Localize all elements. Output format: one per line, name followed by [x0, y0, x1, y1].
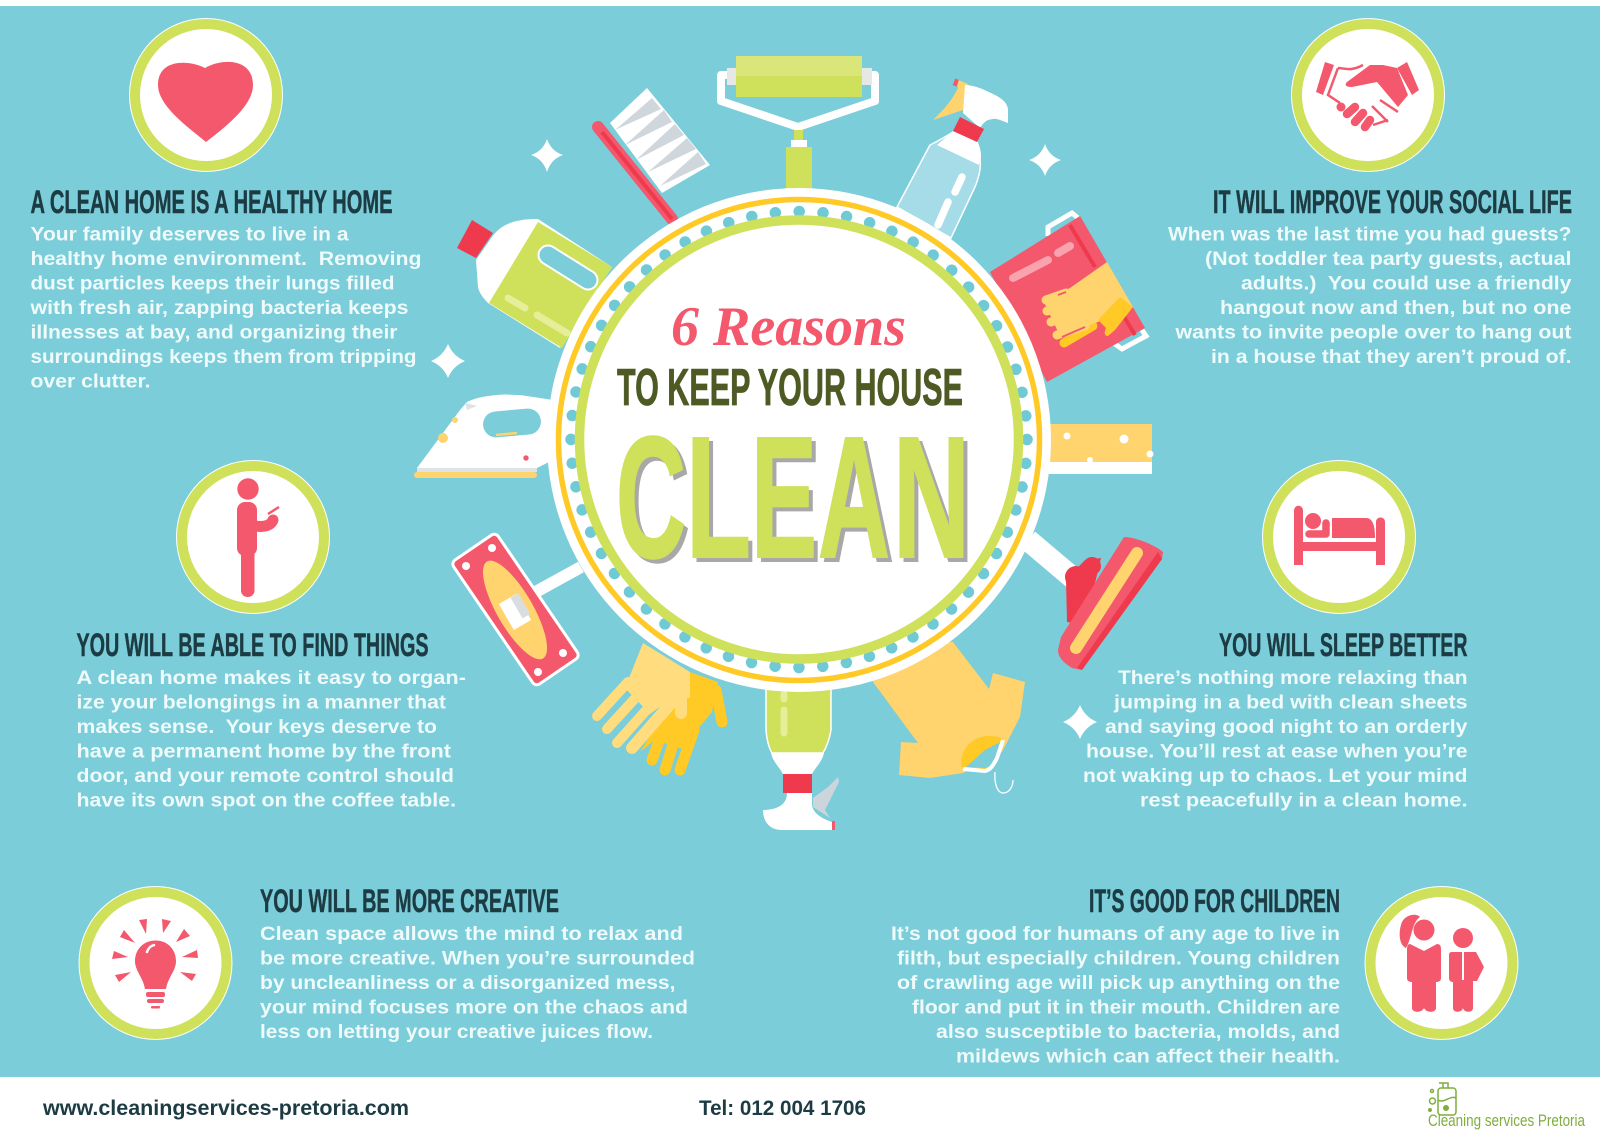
- icon: handshake: [1291, 18, 1445, 172]
- icon: mop: [451, 532, 581, 687]
- text block: have a permanent home by the front: [76, 742, 452, 762]
- panel: children: [891, 883, 1518, 1068]
- text block: door, and your remote control should: [76, 766, 454, 787]
- cleaning tools ring: [414, 56, 1163, 830]
- title: to keep your house: TO KEEP YOUR HOUSE: [617, 359, 963, 417]
- text block: with fresh air, zapping bacteria keeps: [29, 298, 409, 319]
- icon: yellow shirt: [873, 640, 1025, 793]
- heading: YOU WILL BE ABLE TO FIND THINGS: [76, 627, 428, 663]
- icon: spray bottle: [897, 78, 1008, 238]
- icon: person: [176, 460, 330, 614]
- title: clean: E: [755, 404, 821, 598]
- icon: squeegee: [1028, 537, 1163, 670]
- heading: A CLEAN HOME IS A HEALTHY HOME: [30, 184, 392, 220]
- website: www.cleaningservices-pretoria.com: [42, 1097, 409, 1120]
- text block: It’s not good for humans of any age to live in: [891, 924, 1340, 945]
- text block: have its own spot on the coffee table.: [76, 790, 456, 812]
- title: clean: N: [893, 400, 970, 594]
- title: clean: L: [690, 404, 755, 598]
- icon: bleach bottle: [457, 219, 612, 348]
- icon: bottom spray bottle: [763, 688, 839, 830]
- icon: children: [1364, 886, 1518, 1040]
- text block: [260, 924, 695, 1043]
- icon: iron: [414, 395, 553, 478]
- icon: soap bottle: [1429, 1083, 1456, 1115]
- icon: brush: [598, 88, 710, 219]
- title: clean: C: [616, 400, 686, 594]
- text block: over clutter.: [30, 372, 150, 392]
- text block: be more creative. When you’re surrounded: [260, 948, 695, 970]
- footer: [42, 1083, 1585, 1130]
- title: clean: A: [822, 404, 894, 598]
- text block: rest peacefully in a clean home.: [1140, 790, 1468, 812]
- deep yellow glove: [640, 672, 722, 770]
- text block: dust particles keeps their lungs filled: [30, 274, 394, 294]
- text block: your mind focuses more on the chaos and: [260, 998, 688, 1018]
- panel: social life: [1168, 18, 1572, 368]
- icon: paint roller: [721, 56, 875, 189]
- text block: by uncleanliness or a disorganized mess,: [260, 973, 676, 994]
- text block: mildews which can affect their health.: [956, 1046, 1340, 1068]
- panel: sleep better: [1083, 460, 1468, 812]
- text block: makes sense. Your keys deserve to: [76, 717, 437, 738]
- text block: ize your belongings in a manner that: [76, 692, 447, 714]
- text block: jumping in a bed with clean sheets: [1113, 692, 1468, 714]
- text block: When was the last time you had guests?: [1168, 224, 1572, 246]
- text block: There’s nothing more relaxing than: [1118, 668, 1468, 689]
- title: clean: [616, 400, 974, 598]
- icon: red box with yellow glove: [990, 213, 1146, 382]
- title: clean: A: [818, 400, 890, 594]
- text block: healthy home environment. Removing: [30, 249, 422, 270]
- panel: healthy home: [29, 18, 422, 392]
- text block: A clean home makes it easy to organ-: [76, 668, 466, 689]
- text block: floor and put it in their mouth. Children are: [912, 998, 1340, 1018]
- text block: hangout now and then, but no one: [1220, 298, 1572, 319]
- heading: YOU WILL BE MORE CREATIVE: [260, 883, 559, 919]
- text block: illnesses at bay, and organizing their: [30, 322, 398, 344]
- text block: of crawling age will pick up anything on the: [897, 973, 1340, 994]
- text block: not waking up to chaos. Let your mind: [1083, 766, 1468, 787]
- logo: [1428, 1083, 1585, 1130]
- text block: [29, 224, 422, 392]
- text block: [1083, 668, 1468, 812]
- text block: [1168, 224, 1572, 368]
- sparkle stars: [431, 139, 1097, 739]
- icon: rubber gloves: [597, 643, 722, 770]
- text block: less on letting your creative juices flow.: [260, 1022, 653, 1043]
- telephone: Tel: 012 004 1706: [699, 1097, 866, 1120]
- title: clean: E: [751, 400, 817, 594]
- light yellow glove: [597, 643, 690, 748]
- text block: house. You’ll rest at ease when you’re: [1086, 742, 1468, 762]
- icon: heart: [129, 18, 283, 172]
- text block: in a house that they aren’t proud of.: [1211, 347, 1572, 368]
- text block: filth, but especially children. Young children: [897, 948, 1340, 970]
- icon: sponge: [1040, 424, 1154, 474]
- panel: find things: [76, 460, 466, 812]
- text block: [891, 924, 1340, 1068]
- text block: Clean space allows the mind to relax and: [260, 924, 683, 945]
- icon: bed: [1262, 460, 1416, 614]
- text block: [76, 668, 466, 812]
- text block: adults.) You could use a friendly: [1241, 274, 1572, 294]
- heading: IT’S GOOD FOR CHILDREN: [1089, 883, 1340, 919]
- title: clean: N: [897, 404, 974, 598]
- title: clean: C: [620, 404, 690, 598]
- icon: light bulb: [78, 886, 232, 1040]
- text block: (Not toddler tea party guests, actual: [1205, 249, 1572, 270]
- text block: wants to invite people over to hang out: [1174, 322, 1572, 344]
- central badge: [547, 188, 1051, 692]
- title: 6 Reasons: 6 Reasons: [671, 296, 906, 358]
- text block: also susceptible to bacteria, molds, and: [936, 1022, 1340, 1043]
- title: clean: L: [686, 400, 751, 594]
- text block: Your family deserves to live in a: [30, 224, 349, 246]
- panel: creative: [78, 883, 695, 1043]
- text block: surroundings keeps them from tripping: [30, 347, 416, 368]
- text block: and saying good night to an orderly: [1105, 717, 1468, 738]
